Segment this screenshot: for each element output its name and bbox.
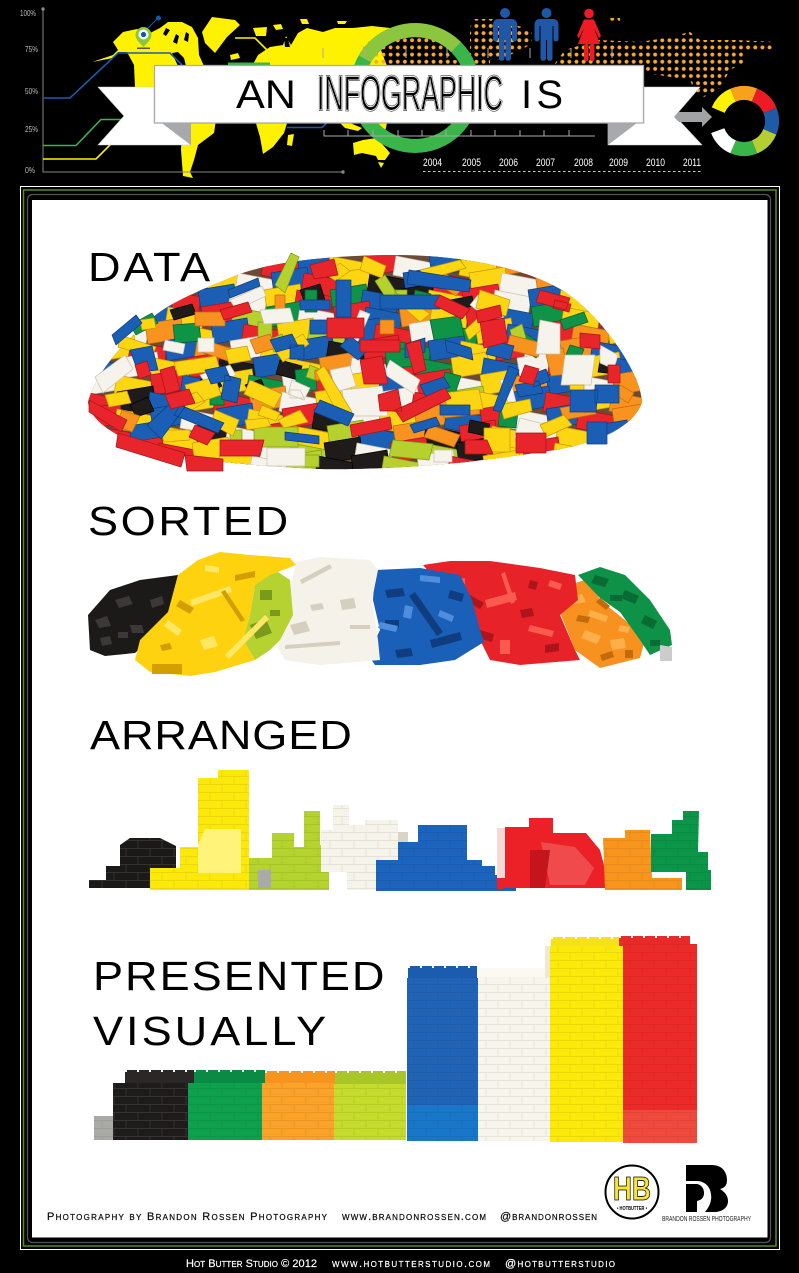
logo: hot butter: HB <box>613 1170 651 1207</box>
studio credits: @hotbutterstudio <box>505 1258 615 1270</box>
title: INFOGRAPHIC <box>317 67 503 121</box>
map cutouts <box>163 28 290 66</box>
year labels: 2006 <box>499 157 518 169</box>
red stack <box>497 818 610 890</box>
logo: brandon rossen photography <box>662 1165 751 1223</box>
orange stack <box>603 830 682 890</box>
title: AN <box>236 73 296 117</box>
axis labels: 50% <box>25 87 38 96</box>
bar: yellow <box>550 937 623 1142</box>
studio credits <box>186 1258 615 1270</box>
bar: green <box>188 1070 265 1140</box>
photography credits: @brandonrossen <box>500 1211 597 1223</box>
year labels: 2009 <box>609 157 628 169</box>
icon: man <box>534 8 558 61</box>
red bricks <box>423 561 580 665</box>
studio credits: Hot Butter Studio © 2012 <box>186 1258 317 1270</box>
photo: bricks arranged in piles <box>89 770 711 891</box>
title <box>236 67 563 121</box>
detail bricks <box>89 253 634 471</box>
title: INFOGRAPHIC <box>317 67 503 121</box>
studio credits: www.hotbutterstudio.com <box>332 1258 490 1270</box>
icon: man <box>493 8 517 61</box>
axis labels <box>20 9 38 175</box>
lime bricks <box>243 570 293 660</box>
lime stack <box>249 811 329 890</box>
green ring chart <box>357 30 473 146</box>
yellow stack <box>150 770 256 890</box>
bar: red <box>619 936 697 1143</box>
green bricks <box>578 567 672 661</box>
green stack <box>651 811 711 890</box>
yellow bricks <box>135 552 296 676</box>
bar: black <box>113 1070 194 1140</box>
map pin <box>136 16 161 49</box>
photography credits <box>47 1211 597 1223</box>
heading: presented visually <box>93 954 384 1055</box>
year labels: 2005 <box>462 157 481 169</box>
photo: unsorted brick pile <box>88 252 642 472</box>
year labels: 2004 <box>423 157 442 169</box>
line chart axes <box>20 7 345 175</box>
heading: presented visually: PRESENTED <box>93 954 385 1000</box>
black bricks <box>88 575 178 656</box>
year labels: 2008 <box>574 157 593 169</box>
donut chart <box>718 93 772 149</box>
bar: blue <box>407 966 478 1141</box>
logo: hot butter: • HOTBUTTER • <box>617 1206 647 1212</box>
framed panel <box>20 186 780 1250</box>
orange bricks <box>555 578 645 668</box>
blue stack <box>376 825 516 891</box>
dot-matrix world map <box>363 18 776 97</box>
heading: data: DATA <box>88 245 210 291</box>
photo: bar chart made of bricks <box>94 936 697 1143</box>
title banner <box>154 66 644 123</box>
year labels <box>423 157 701 169</box>
white bricks <box>273 557 380 665</box>
year labels: 2011 <box>683 157 701 169</box>
heading: arranged: ARRANGED <box>90 713 352 759</box>
header graphic <box>20 7 780 178</box>
year labels: 2010 <box>646 157 665 169</box>
heading: presented visually: VISUALLY <box>93 1009 326 1055</box>
timeline ticks <box>323 48 612 136</box>
ribbon right <box>608 87 702 145</box>
heading: sorted: SORTED <box>88 499 288 545</box>
title: IS <box>521 73 563 117</box>
blue bricks <box>368 568 484 665</box>
photo: bricks sorted by colour <box>88 552 672 676</box>
world map <box>92 17 392 178</box>
white stack <box>321 805 408 890</box>
axis labels: 0% <box>25 166 35 175</box>
logo: brandon rossen photography: BRANDON ROSSEN PHOTOGRAPHY <box>662 1216 751 1223</box>
bar: orange <box>262 1071 335 1140</box>
chart lines <box>43 38 336 159</box>
ribbon left <box>98 87 191 145</box>
year labels: 2007 <box>536 157 555 169</box>
bar: grey <box>94 1116 114 1140</box>
arrow <box>674 107 712 127</box>
photography credits: Photography by Brandon Rossen Photography <box>47 1211 328 1223</box>
axis labels: 100% <box>20 9 36 18</box>
axis labels: 75% <box>25 45 38 54</box>
logo: hot butter <box>606 1166 658 1218</box>
base layer of bricks <box>88 255 642 470</box>
axis labels: 25% <box>25 125 38 134</box>
icon: woman <box>577 9 601 61</box>
black stack <box>89 838 176 888</box>
bar: lime <box>334 1071 406 1140</box>
bar: white <box>478 946 551 1141</box>
photography credits: www.brandonrossen.com <box>342 1211 486 1223</box>
